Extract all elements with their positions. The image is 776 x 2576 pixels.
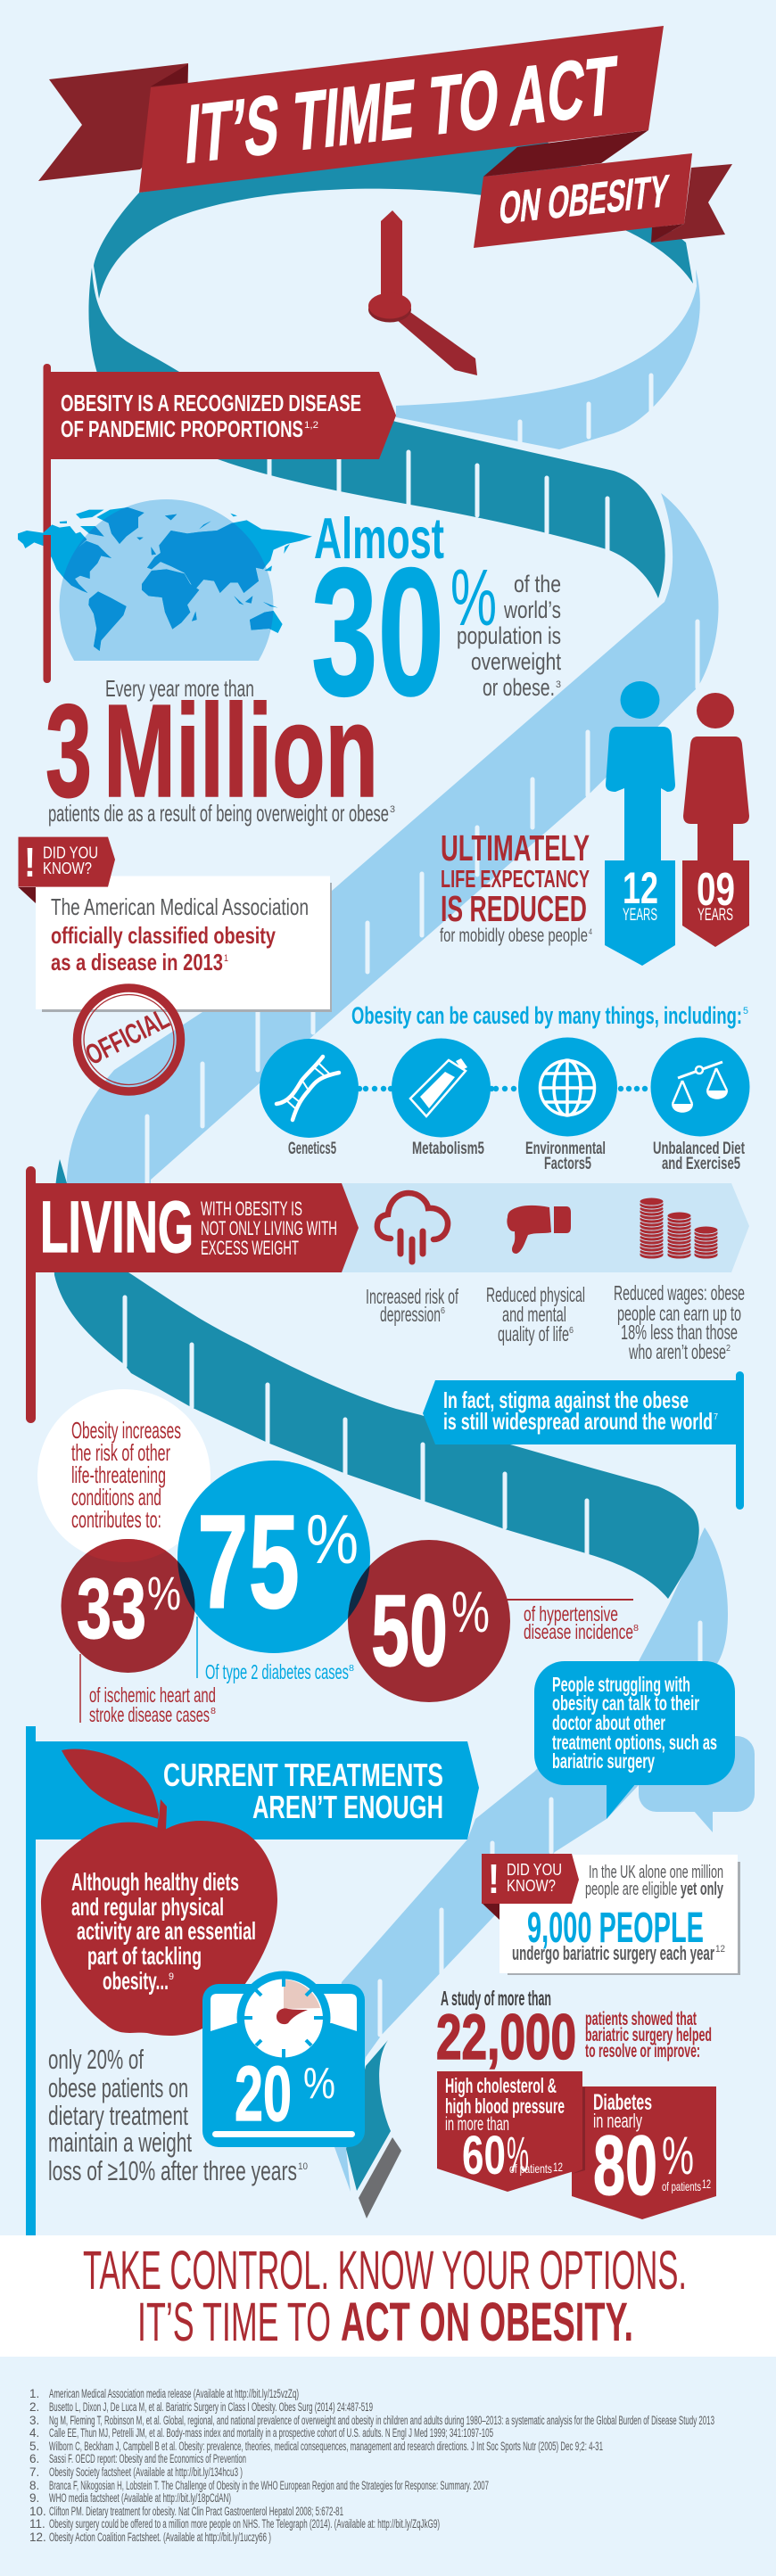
stat: almost 30 percent: overweight (471, 648, 561, 675)
block: cholesterol 60 percent: in more than (445, 2114, 509, 2135)
flag: pandemic heading: 1,2 (304, 420, 318, 431)
cause labels: Metabolism5 (412, 1140, 484, 1158)
closing call to action: IT’S TIME TO (137, 2292, 331, 2352)
stat: almost 30 percent: population is (457, 622, 561, 649)
living with obesity banner: NOT ONLY LIVING WITH (201, 1217, 337, 1239)
circle captions: stroke disease cases (89, 1703, 210, 1726)
block: cholesterol 60 percent (437, 2071, 582, 2192)
current treatments banner (26, 1726, 479, 2235)
references list: 9. (29, 2491, 39, 2505)
cause labels: Genetics5 (288, 1140, 336, 1158)
living with obesity banner: LIVING (40, 1187, 194, 1268)
did you know: AMA: ! (24, 839, 36, 885)
stat: 3 million deaths: patients die as a result of being overweight or obese (48, 800, 389, 827)
references list: 11. (29, 2517, 45, 2531)
references list: 6. (29, 2452, 39, 2465)
references list: Obesity Action Coalition Factsheet. (Available at http://bit.ly/1uczy66 ) (49, 2531, 271, 2544)
references list: 4. (29, 2426, 39, 2440)
references list: 5. (29, 2440, 39, 2453)
did you know: UK: 12 (715, 1944, 725, 1955)
study of 22,000 patients (436, 1987, 712, 2073)
references list: Sassi F. OECD report: Obesity and the Economics of Prevention (49, 2452, 246, 2465)
circle: 33 percent: % (147, 1568, 181, 1620)
block: diabetes 80 percent: of patients (662, 2179, 701, 2193)
references list: 7. (29, 2465, 39, 2479)
references list: Obesity Society factsheet (Available at http://bit.ly/134hcu3 ) (49, 2465, 243, 2479)
flag: pandemic heading: OF PANDEMIC PROPORTIONS (61, 416, 303, 442)
stat: almost 30 percent: or obese. (483, 674, 555, 701)
figure: woman 09 years: YEARS (698, 906, 733, 925)
apple with text (41, 1749, 277, 2036)
living effects text: 6 (569, 1326, 574, 1336)
references list: Obesity surgery could be offered to a million more people on NHS. The Telegraph (2014). (Available at: http://bit.ly/ZqJkG9) (49, 2517, 440, 2531)
living with obesity banner: EXCESS WEIGHT (201, 1237, 299, 1259)
figure: woman 09 years (682, 693, 749, 947)
icon: coin stacks (640, 1197, 718, 1259)
icon: battery metabolism (392, 1038, 491, 1138)
intro circle (37, 1389, 211, 1562)
living effects text: 2 (726, 1344, 731, 1354)
references list: 3. (29, 2414, 39, 2427)
references list: WHO media factsheet (Available at http://bit.ly/18pCdAN) (49, 2491, 231, 2505)
outcome blocks (437, 2071, 716, 2219)
references list (29, 2387, 714, 2544)
living effects text: 6 (441, 1306, 445, 1316)
stat: almost 30 percent: world’s (503, 597, 561, 623)
life expectancy text: ULTIMATELY (441, 827, 590, 868)
circle: 50 percent (348, 1540, 510, 1702)
icon: globe environment (518, 1038, 617, 1136)
figure: woman 09 years: 09 (697, 864, 735, 916)
references list: 1. (29, 2387, 39, 2400)
figure: man 12 years: 12 (623, 863, 658, 913)
stigma banner: 7 (714, 1412, 718, 1422)
did you know: AMA: DID YOU (43, 844, 98, 861)
apple with text: and regular physical (71, 1893, 224, 1921)
current treatments banner: AREN’T ENOUGH (252, 1789, 443, 1825)
block: diabetes 80 percent: 12 (702, 2177, 711, 2191)
speech bubbles (534, 1661, 755, 1832)
closing call to action (0, 2235, 776, 2357)
living with obesity banner: WITH OBESITY IS (201, 1197, 302, 1220)
references list: Busetto L, Dixon J, De Luca M, et al. Bariatric Surgery in Class I Obesity. Obes Surg (2014) 24:487-519 (49, 2400, 373, 2414)
references list: 2. (29, 2400, 39, 2414)
circle: 50 percent: % (451, 1579, 490, 1644)
cause labels: and Exercise5 (662, 1155, 740, 1173)
did you know: AMA: officially classified obesity (51, 922, 276, 949)
icon: weighing scale 20 percent: % (303, 2060, 335, 2108)
intro circle: Obesity increases (71, 1417, 181, 1444)
study of 22,000 patients: to resolve or improve: (585, 2041, 700, 2062)
speech bubbles: doctor about other (552, 1711, 665, 1734)
subtitle text: ON OBESITY (497, 165, 672, 234)
tape tick marks (125, 375, 700, 2035)
circle: 75 percent: 75 (197, 1486, 300, 1636)
did you know: AMA: The American Medical Association (51, 893, 309, 920)
living effects text: Reduced physical (486, 1283, 585, 1306)
did you know: UK: people are eligible yet only (585, 1880, 724, 1899)
block: cholesterol 60 percent: 60 (462, 2125, 506, 2185)
leader lines (80, 1600, 633, 1723)
icon: rain cloud (377, 1193, 448, 1262)
study of 22,000 patients: A study of more than (441, 1987, 551, 2010)
circle captions: 8 (633, 1624, 639, 1634)
block: diabetes 80 percent (572, 2086, 716, 2219)
did you know: AMA: as a disease in 2013 (51, 949, 223, 975)
cause labels: Factors5 (544, 1155, 591, 1173)
dietary treatment text: dietary treatment (48, 2100, 188, 2131)
living effects text: quality of life (498, 1322, 569, 1346)
circle captions: 8 (349, 1664, 354, 1674)
stat: 3 million deaths: 3 (390, 804, 395, 815)
block: diabetes 80 percent: 80 (593, 2119, 657, 2213)
references list: 12. (29, 2531, 46, 2544)
apple with text: Although healthy diets (71, 1868, 239, 1896)
did you know: UK: DID YOU (507, 1861, 562, 1879)
speech bubbles: obesity can talk to their (552, 1691, 699, 1715)
circle: 75 percent: % (306, 1500, 359, 1578)
did you know: AMA: KNOW? (43, 860, 92, 877)
intro circle: conditions and (71, 1484, 161, 1510)
cause labels: Environmental (525, 1140, 606, 1158)
circle: 33 percent (61, 1539, 194, 1673)
speech bubbles: People struggling with (552, 1673, 690, 1696)
icon: DNA genetics (260, 1039, 359, 1138)
apple with text: part of tackling (87, 1942, 202, 1970)
icon: balance scale (651, 1038, 749, 1136)
circle captions: of ischemic heart and (89, 1683, 216, 1707)
intro circle: life-threatening (71, 1461, 166, 1488)
did you know: UK: ! (488, 1856, 499, 1902)
block: diabetes 80 percent: Diabetes (593, 2090, 652, 2115)
icon: thumbs down (507, 1206, 571, 1254)
figure: man 12 years (605, 681, 675, 966)
life expectancy text: IS REDUCED (441, 888, 587, 929)
block: cholesterol 60 percent: % (507, 2126, 529, 2182)
circle captions: 8 (211, 1707, 216, 1716)
stat: 3 million deaths: Every year more than (105, 675, 254, 702)
dietary treatment text: 10 (298, 2161, 308, 2172)
life expectancy text: for mobidly obese people (440, 926, 588, 946)
circle captions (89, 1602, 639, 1726)
risk circles (37, 1389, 639, 1726)
measuring tape ribbon (54, 134, 728, 2218)
block: diabetes 80 percent: % (662, 2126, 694, 2185)
circle captions: of hypertensive (524, 1602, 618, 1625)
official stamp: OFFICIAL (80, 1002, 174, 1071)
stat: 3 million deaths (45, 675, 395, 827)
stat: almost 30 percent: Almost (314, 506, 444, 571)
world map globe (18, 499, 312, 661)
stat: almost 30 percent: 3 (556, 679, 561, 690)
did you know: UK (482, 1854, 740, 1975)
block: cholesterol 60 percent: high blood pressure (445, 2095, 565, 2118)
figure: man 12 years: YEARS (623, 906, 657, 925)
living effects text: and mental (502, 1303, 566, 1326)
life expectancy text (440, 827, 592, 946)
title banner (38, 26, 732, 248)
dietary treatment text: maintain a weight (48, 2127, 192, 2158)
life expectancy text: LIFE EXPECTANCY (441, 865, 590, 893)
references list: Clifton PM. Dietary treatment for obesity. Nat Clin Pract Gastroenterol Hepatol 2008; 5:672-81 (49, 2505, 343, 2518)
stat: almost 30 percent: of the (514, 571, 561, 597)
apple with text: activity are an essential (77, 1917, 256, 1945)
circle: 33 percent: 33 (77, 1561, 146, 1657)
clock hands (368, 210, 477, 375)
causes heading: 5 (743, 1006, 748, 1016)
block: cholesterol 60 percent: 12 (553, 2160, 563, 2174)
apple with text: obesity... (103, 1967, 169, 1995)
block: cholesterol 60 percent: High cholesterol & (445, 2074, 557, 2097)
life expectancy text: 4 (589, 927, 592, 936)
official stamp (77, 988, 180, 1091)
icon: weighing scale 20 percent (202, 1971, 365, 2147)
intro circle: the risk of other (71, 1439, 170, 1466)
dietary treatment text: only 20% of (48, 2044, 144, 2075)
dietary treatment text (48, 2044, 308, 2186)
living effects text (366, 1281, 745, 1363)
cause labels (288, 1140, 745, 1173)
stigma banner (423, 1371, 744, 1510)
stat: 3 million deaths: Million (103, 678, 378, 825)
connector dots (357, 1086, 648, 1091)
circle captions: Of type 2 diabetes cases (205, 1660, 349, 1683)
dietary treatment text: loss of ≥10% after three years (48, 2155, 297, 2186)
circle: 75 percent (177, 1461, 370, 1653)
did you know: AMA (18, 837, 332, 1012)
circle: 50 percent: 50 (371, 1575, 448, 1688)
living effects text: Increased risk of (366, 1285, 458, 1308)
study of 22,000 patients: 22,000 (436, 2003, 576, 2073)
study of 22,000 patients: patients showed that (585, 2009, 697, 2029)
stat: 3 million deaths: 3 (45, 678, 92, 825)
current treatments banner: CURRENT TREATMENTS (163, 1757, 443, 1793)
living effects text: depression (380, 1303, 441, 1326)
living with obesity banner (26, 1166, 749, 1423)
references list: 10. (29, 2505, 46, 2518)
stat: almost 30 percent: % (450, 554, 497, 643)
intro circle: contributes to: (71, 1506, 161, 1533)
icon: weighing scale 20 percent: 20 (235, 2051, 292, 2137)
block: diabetes 80 percent: in nearly (593, 2110, 642, 2132)
speech bubbles: bariatric surgery (552, 1749, 655, 1773)
apple with text: 9 (169, 1971, 174, 1982)
flag: pandemic heading (43, 364, 396, 683)
block: cholesterol 60 percent: of patients (509, 2161, 552, 2176)
dietary treatment text: obese patients on (48, 2072, 188, 2103)
did you know: UK: KNOW? (507, 1877, 556, 1895)
stat: almost 30 percent: 30 (311, 531, 444, 734)
circle captions: disease incidence (524, 1620, 633, 1643)
references list: American Medical Association media release (Available at http://bit.ly/1z5vzZq) (49, 2387, 299, 2400)
references list: 8. (29, 2479, 39, 2492)
causes section (260, 1002, 749, 1173)
did you know: AMA: 1 (224, 953, 228, 964)
flag: pandemic heading: OBESITY IS A RECOGNIZED DISEASE (61, 390, 361, 416)
